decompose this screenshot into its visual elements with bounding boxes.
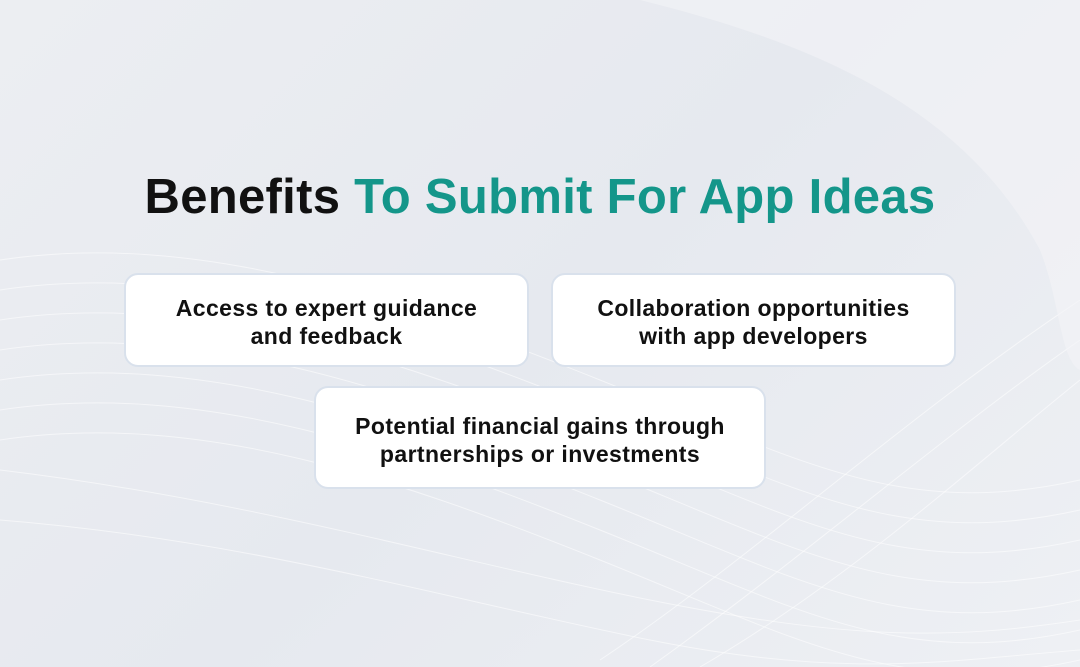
card: financial gains: partnerships or investments <box>380 440 700 466</box>
card: expert guidance <box>124 273 529 367</box>
card: collaboration: with app developers <box>639 323 868 349</box>
card: expert guidance: and feedback <box>251 323 402 349</box>
card: financial gains <box>314 386 766 489</box>
title: Benefits To Submit For App Ideas <box>145 170 935 224</box>
card: collaboration <box>551 273 956 367</box>
card: expert guidance: Access to expert guidance <box>176 295 477 321</box>
card: financial gains: Potential financial gains through <box>355 412 725 438</box>
card: collaboration: Collaboration opportunities <box>597 295 910 321</box>
